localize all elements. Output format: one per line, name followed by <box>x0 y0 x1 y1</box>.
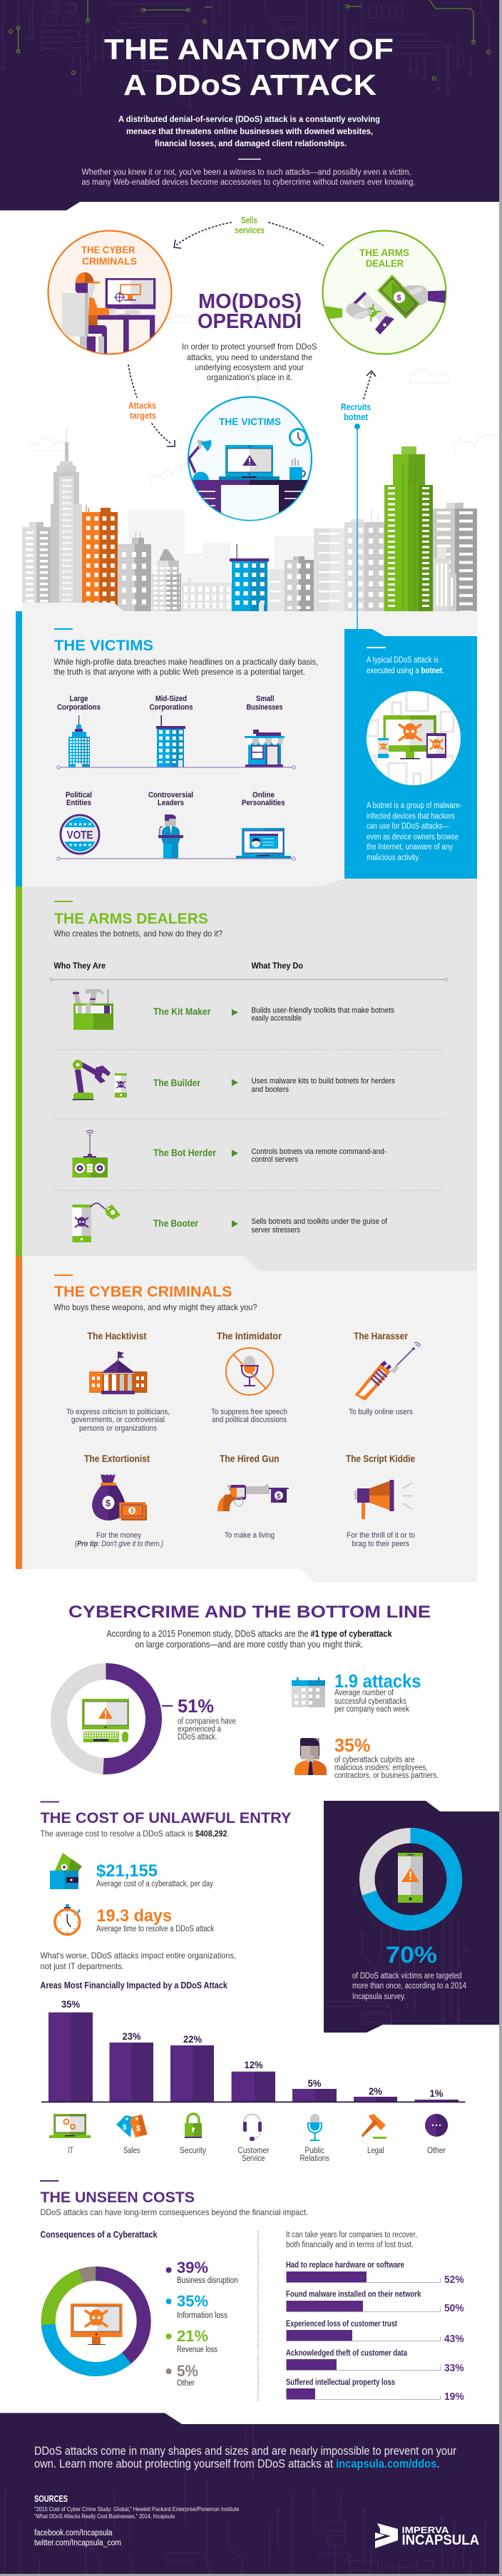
sidebar text bottom: malicious activity. <box>367 854 420 862</box>
stat: 35 percent insiders: malicious insiders: employees, <box>334 1764 428 1772</box>
label: recruits botnet: Recruits <box>341 402 371 412</box>
mid grey building <box>118 532 151 611</box>
criminal type: hacktivist: governments, or controversial <box>71 1416 165 1424</box>
arrow: attacks targets dotted lead <box>128 365 137 397</box>
recovery text <box>286 2231 417 2249</box>
horizontal bar chart: long-term impact: Suffered intellectual property loss <box>286 2378 395 2387</box>
victim labels row 1: Small <box>256 695 274 703</box>
heading: mo(ddos) operandi <box>198 290 302 333</box>
bar labels: Customer <box>238 2147 270 2155</box>
victim labels row 1 <box>57 695 282 712</box>
cyber criminals intro: Who buys these weapons, and why might they attack you? <box>54 1302 257 1312</box>
intro regular text <box>81 168 415 187</box>
icon: sales tags: $ <box>123 2124 127 2132</box>
legend: consequences <box>166 2259 238 2388</box>
stat: 70 percent: Incapsula survey. <box>352 1993 406 2001</box>
icon: money bag: $ <box>106 1498 111 1508</box>
far right grey building <box>433 503 477 611</box>
logo: imperva incapsula: IMPERVA <box>402 2525 449 2535</box>
modus operandi text: underlying ecosystem and your <box>195 362 304 372</box>
stat: 51 percent: DDoS attack. <box>178 1733 217 1742</box>
footer call to action <box>34 2444 456 2470</box>
icon: sales tags <box>116 2115 147 2137</box>
circuit pattern in panel <box>324 1918 468 2024</box>
panel: the arms dealers <box>16 879 477 1271</box>
icon: legal gavel <box>362 2114 386 2139</box>
bar values: 23% <box>123 2030 141 2042</box>
criminal type: harasser <box>349 1330 421 1416</box>
icon: speaker at podium <box>158 814 183 859</box>
icon: vote badge <box>61 815 99 854</box>
criminal type: intimidator: The Intimidator <box>217 1330 282 1341</box>
legend: consequences: 21% <box>177 2327 208 2345</box>
sources: SOURCES <box>34 2494 68 2504</box>
icon: phone warning <box>398 1853 423 1903</box>
circle: the arms dealer: THE ARMS <box>359 247 409 258</box>
victim labels row 1: Large <box>70 695 88 703</box>
intro regular text: as many Web-enabled devices become accessories to cybercrime without owners ever knowing. <box>81 178 415 187</box>
row: the builder <box>73 1060 395 1100</box>
intro bold text: menace that threatens online businesses with downed websites, <box>126 126 373 136</box>
sources <box>34 2494 240 2547</box>
bar values: 22% <box>183 2033 203 2045</box>
stat: 21,155 dollars: $21,155 <box>96 1861 158 1881</box>
stat: 35 percent insiders <box>334 1734 439 1780</box>
horizontal bar chart: long-term impact: 43% <box>444 2334 464 2345</box>
circle: the arms dealer: DEALER <box>366 257 404 269</box>
legend: consequences: 39% <box>177 2259 208 2276</box>
section intro: on large corporations—and are more costly than you might think. <box>135 1640 364 1650</box>
footer <box>0 2413 499 2574</box>
illustration: desk with laptop <box>187 428 314 521</box>
icon: vote badge: VOTE <box>67 829 93 842</box>
donut chart: 70 percent <box>367 1836 454 1923</box>
victim labels row 2: Online <box>252 791 275 799</box>
illustration: exchange of money and malware <box>324 275 446 334</box>
criminal type: script kiddie: The Script Kiddie <box>346 1453 415 1464</box>
stat: 35 percent insiders: contractors, or business partners. <box>334 1772 439 1780</box>
label: attacks targets: targets <box>130 411 156 421</box>
section intro: The average cost to resolve a DDoS attack is $408,292. <box>40 1829 230 1839</box>
row: the kit maker: The Kit Maker <box>153 1006 211 1017</box>
bar labels: Service <box>242 2155 265 2163</box>
bar values: 35% <box>61 1998 81 2010</box>
bar labels: IT <box>68 2147 73 2155</box>
stat: 51 percent: experienced a <box>178 1725 222 1734</box>
stat: 1.9 attacks: Average number of <box>334 1689 394 1697</box>
icon: wallet with cash <box>50 1853 82 1889</box>
icon: mid-sized corporation <box>156 715 185 767</box>
victim labels row 1: Corporations <box>57 703 101 712</box>
circle: the victims: THE VICTIMS <box>219 416 281 427</box>
connector: recruits botnet line <box>354 424 360 630</box>
criminal type: hired gun: The Hired Gun <box>220 1453 280 1464</box>
bar labels: Legal <box>367 2147 384 2155</box>
right mid grey building <box>285 556 314 611</box>
criminal type: hacktivist: To express criticism to politicians, <box>66 1408 170 1416</box>
criminal type: intimidator: To suppress free speech <box>211 1408 287 1416</box>
section: the unseen costs <box>40 2180 464 2403</box>
intro regular text: Whether you knew it or not, you've been a witness to such attacks—and possibly even a victim, <box>81 168 411 177</box>
criminal type: script kiddie: brag to their peers <box>352 1540 409 1548</box>
stat: 51 percent <box>178 1695 236 1742</box>
icon: computer warning <box>82 1699 129 1742</box>
stat: 70 percent: of DDoS attack victims are targeted <box>352 1972 462 1980</box>
bar labels: Public <box>305 2147 324 2155</box>
arms dealers intro: Who creates the botnets, and how do they do it? <box>54 929 222 939</box>
circle: the cyber criminals <box>48 231 171 358</box>
legend: consequences: Revenue loss <box>177 2346 217 2354</box>
bar labels: Relations <box>299 2155 329 2163</box>
sidebar text top: executed using a botnet. <box>367 667 444 675</box>
circle: the arms dealer <box>322 231 446 354</box>
icon: robot arm and phone <box>73 1060 127 1100</box>
icon: banned microphone <box>226 1348 273 1395</box>
section intro: According to a 2015 Ponemon study, DDoS attacks are the #1 type of cyberattack <box>107 1629 392 1639</box>
criminal type: hired gun: To make a living <box>225 1531 275 1540</box>
modus operandi text: attacks, you need to understand the <box>187 352 312 362</box>
circle: the cyber criminals: CRIMINALS <box>82 255 137 267</box>
criminal type: extortionist: The Extortionist <box>84 1453 150 1464</box>
icon: vote badge: ★★★★★ <box>68 842 92 848</box>
sources: "2015 Cost of Cyber Crime Study: Global," Hewlett Packard Enterprise/Ponemon Institute <box>34 2505 240 2513</box>
blue building <box>230 544 269 611</box>
panel: 70 percent repeat victims <box>324 1801 499 2033</box>
logo: imperva incapsula <box>375 2523 479 2548</box>
icon: sales tags: $ <box>136 2125 140 2133</box>
sidebar text bottom: infected devices that hackers <box>367 812 455 821</box>
pale background buildings <box>128 509 314 611</box>
sources: "What DDoS Attacks Really Cost Businesses," 2014, Incapsula <box>34 2513 175 2520</box>
stat: 19.3 days: Average time to resolve a DDoS attack <box>96 1925 214 1933</box>
illustration: exchange of money and malware: $ <box>396 294 401 302</box>
recovery text: It can take years for companies to recover, <box>286 2231 417 2239</box>
sidebar text bottom: can use for DDoS attacks— <box>367 822 449 831</box>
bar chart: financial impact areas <box>41 1998 465 2102</box>
icon: insider person <box>294 1738 327 1775</box>
modus operandi text <box>182 342 317 382</box>
title: THE ANATOMY OF <box>104 33 394 66</box>
arrow: sells services to cyber criminals <box>174 223 231 248</box>
icon: phone with price tag <box>73 1203 121 1242</box>
grey spired building <box>152 549 181 611</box>
tall light building <box>314 528 344 611</box>
paragraph: what's worse <box>40 1951 236 1971</box>
icon: security padlock <box>185 2114 202 2138</box>
icon: vote badge: ★★★★★ <box>68 822 92 827</box>
stat: 1.9 attacks: successful cyberattacks <box>334 1697 406 1706</box>
horizontal bar chart: long-term impact: Acknowledged theft of customer data <box>286 2349 407 2358</box>
paragraph: what's worse: not just IT departments. <box>40 1961 124 1971</box>
row: the bot herder: control servers <box>251 1155 298 1164</box>
header banner <box>0 0 499 210</box>
recovery text: both financially and in terms of lost trust. <box>286 2241 414 2249</box>
horizontal bar chart: long-term impact: Found malware installed on their network <box>286 2291 421 2299</box>
icon: stopwatch <box>55 1904 81 1934</box>
sidebar text bottom <box>367 802 462 862</box>
label: attacks targets <box>128 401 156 421</box>
heading: mo(ddos) operandi: OPERANDI <box>198 310 302 333</box>
icon: public relations microphone <box>307 2114 322 2141</box>
chart title: Areas Most Financially Impacted by a DDoS Attack <box>40 1980 227 1990</box>
bar values: 1% <box>429 2087 444 2099</box>
light low building <box>182 578 232 611</box>
bar labels: Sales <box>123 2147 140 2155</box>
donut chart: 51 percent <box>58 1672 154 1766</box>
sidebar text bottom: the Internet, unaware of any <box>367 843 453 852</box>
icon: large corporation tower <box>68 715 90 767</box>
intro bold text: A distributed denial-of-service (DDoS) attack is a constantly evolving <box>118 114 380 124</box>
grey building far left <box>22 522 51 611</box>
panel: the victims <box>16 603 477 886</box>
arrow: dotted from arms dealer <box>269 223 323 245</box>
criminal type: hired gun <box>217 1453 289 1540</box>
timeline row 1 <box>57 766 295 769</box>
stat: 35 percent insiders: 35% <box>334 1734 371 1756</box>
panel: botnet sidebar <box>344 629 477 879</box>
illustration: infected devices <box>367 690 461 788</box>
stat: 35 percent insiders: of cyberattack culprits are <box>334 1756 415 1764</box>
stat: 51 percent: of companies have <box>178 1717 236 1726</box>
stat: 1.9 attacks: 1.9 attacks <box>334 1670 421 1692</box>
section intro: DDoS attacks can have long-term consequences beyond the financial impact. <box>40 2207 308 2217</box>
tall grey skyscraper <box>51 428 82 611</box>
stat: 1.9 attacks: per company each week <box>334 1705 409 1714</box>
heading: THE COST OF UNLAWFUL ENTRY <box>40 1810 291 1826</box>
row: the booter: The Booter <box>153 1217 198 1229</box>
criminal type: hacktivist: The Hacktivist <box>87 1330 147 1341</box>
sources: twitter.com/Incapsula_com <box>34 2539 121 2547</box>
bar labels: Other <box>427 2147 446 2155</box>
sidebar text bottom: A botnet is a group of malware- <box>367 802 462 810</box>
criminal type: intimidator: and political discussions <box>212 1416 287 1424</box>
illustration: hacker at desk <box>62 272 155 358</box>
row: the bot herder: Controls botnets via remote command-and- <box>251 1148 386 1156</box>
bar values: 12% <box>244 2059 263 2070</box>
stat: 21,155 dollars <box>96 1861 213 1888</box>
chart title: Consequences of a Cyberattack <box>40 2229 158 2239</box>
stat: 70 percent <box>352 1942 467 2001</box>
label: attacks targets: Attacks <box>128 401 156 411</box>
section: cybercrime and the bottom line <box>58 1603 439 1780</box>
modus operandi text: organization's place in it. <box>207 372 292 382</box>
victim labels row 2: Personalities <box>242 799 285 807</box>
label: recruits botnet: botnet <box>344 412 369 422</box>
legend: consequences: Other <box>177 2379 195 2388</box>
label: sells services <box>235 215 265 235</box>
icon: calendar <box>292 1677 325 1707</box>
circle: the cyber criminals: THE CYBER <box>81 244 135 255</box>
criminal type: intimidator <box>211 1330 287 1424</box>
criminal type: extortionist: (Pro tip: Don't give it to them.) <box>75 1540 163 1548</box>
legend: consequences: 5% <box>177 2362 198 2380</box>
victim labels row 1: Corporations <box>150 703 193 712</box>
sources: facebook.com/Incapsula <box>34 2529 113 2537</box>
row: the booter: Sells botnets and toolkits under the guise of <box>251 1217 388 1226</box>
bar values <box>61 1998 444 2099</box>
icon: other circle <box>425 2114 448 2137</box>
victims intro text <box>54 657 318 677</box>
criminal type: extortionist <box>75 1453 163 1548</box>
donut chart: consequences <box>48 2274 144 2369</box>
row: the kit maker: easily accessible <box>251 1014 302 1023</box>
modus operandi text: In order to protect yourself from DDoS <box>182 342 317 352</box>
row: the booter: server stressers <box>251 1226 300 1235</box>
icon: government building <box>89 1351 147 1394</box>
heading: the arms dealers: THE ARMS DEALERS <box>54 911 208 927</box>
horizontal bar chart: long-term impact: 50% <box>444 2303 464 2314</box>
bar values: 5% <box>308 2077 322 2089</box>
label: recruits botnet <box>341 402 371 422</box>
stat: 19.3 days: 19.3 days <box>97 1906 172 1926</box>
victim labels row 2 <box>66 791 285 807</box>
arrow: attacks targets to victims <box>152 424 175 446</box>
section: the cost of unlawful entry <box>40 1801 465 2163</box>
arrow: recruits botnet <box>364 371 376 399</box>
criminal type: extortionist: For the money <box>96 1531 141 1540</box>
stat: 70 percent: more than once, according to a 2014 <box>352 1982 467 1990</box>
criminal type: harasser: To bully online users <box>349 1408 413 1416</box>
row: the booter <box>73 1203 388 1242</box>
horizontal bar chart: long-term impact: Had to replace hardware or software <box>286 2261 404 2269</box>
heading: mo(ddos) operandi: MO(DDoS) <box>198 290 302 313</box>
horizontal bar chart: long-term impact: 33% <box>444 2363 464 2374</box>
row: the builder: The Builder <box>153 1077 200 1088</box>
circle: the victims <box>187 397 314 521</box>
icon: laptop with profile <box>236 828 291 859</box>
section intro <box>107 1629 392 1650</box>
footer call to action: own. Learn more about protecting yourself from DDoS attacks at incapsula.com/ddos. <box>34 2457 439 2470</box>
header circuit pattern <box>1 0 490 108</box>
bar labels: Security <box>180 2147 206 2155</box>
skyline city illustration <box>22 428 477 611</box>
timeline row 2 <box>57 857 295 860</box>
icon: toolbox <box>73 989 113 1030</box>
clouds <box>31 315 499 487</box>
victim labels row 2: Leaders <box>158 799 184 807</box>
title: A DDoS ATTACK <box>123 68 376 101</box>
row: the kit maker <box>73 989 394 1030</box>
orange building <box>82 505 118 611</box>
victims intro text: While high-profile data breaches make headlines on a practically daily basis, <box>54 657 318 667</box>
heading: THE UNSEEN COSTS <box>40 2189 195 2206</box>
table headers <box>54 961 303 971</box>
intro bold text: financial losses, and damaged client relationships. <box>155 138 347 148</box>
stat: 19.3 days <box>96 1906 214 1933</box>
paragraph: what's worse: What's worse, DDoS attacks impact entire organizations, <box>40 1951 236 1961</box>
footer circuit pattern <box>4 2425 486 2574</box>
intro bold text <box>118 114 380 148</box>
sidebar text top <box>367 656 444 675</box>
stat: 70 percent: 70% <box>386 1942 437 1968</box>
horizontal bar chart: long-term impact: Experienced loss of customer trust <box>286 2320 397 2329</box>
logo: imperva incapsula: INCAPSULA <box>402 2532 479 2548</box>
row: the builder: and booters <box>251 1085 289 1094</box>
legend: consequences: 35% <box>177 2292 208 2310</box>
icon: remote control <box>73 1130 108 1177</box>
sidebar text bottom: even as device owners browse <box>367 833 459 842</box>
bar values: 2% <box>369 2085 383 2097</box>
victim labels row 2: Political <box>66 791 92 799</box>
victim labels row 2: Controversial <box>148 791 193 799</box>
sidebar text top: A typical DDoS attack is <box>367 656 439 665</box>
right light building <box>267 569 285 611</box>
criminal type: harasser: The Harasser <box>354 1330 408 1341</box>
green tower <box>384 446 433 611</box>
icon: infected monitor <box>71 2304 123 2345</box>
criminal type: script kiddie <box>346 1453 415 1548</box>
table headers: Who They Are <box>54 961 106 971</box>
row: the bot herder <box>73 1130 386 1177</box>
row: the kit maker: Builds user-friendly toolkits that make botnets <box>251 1006 394 1015</box>
legend: consequences: Business disruption <box>177 2276 238 2285</box>
victim labels row 2: Entities <box>66 799 91 807</box>
heading: the cyber criminals: THE CYBER CRIMINALS <box>54 1284 232 1300</box>
criminal type: script kiddie: For the thrill of it or to <box>347 1531 415 1540</box>
horizontal bar chart: long-term impact: 19% <box>444 2391 464 2403</box>
icon: customer service headset <box>243 2115 262 2141</box>
icon: small business storefront <box>245 730 285 767</box>
victim labels row 1: Mid-Sized <box>155 695 187 703</box>
stat: 51 percent: 51% <box>178 1695 214 1717</box>
label: sells services: Sells <box>241 215 257 225</box>
panel: the cyber criminals <box>16 1256 477 1583</box>
icon: money bag: $ <box>130 1508 134 1514</box>
icon: money bag <box>92 1474 147 1520</box>
legend: consequences: Information loss <box>177 2311 227 2320</box>
row: the bot herder: The Bot Herder <box>153 1147 216 1158</box>
icon: IT laptop <box>49 2114 91 2138</box>
heading: CYBERCRIME AND THE BOTTOM LINE <box>68 1603 431 1622</box>
table headers: What They Do <box>251 961 303 971</box>
icon: walkie talkie <box>355 1343 421 1401</box>
victim labels row 1: Businesses <box>247 703 282 712</box>
heading: the victims: THE VICTIMS <box>54 638 153 654</box>
victims intro text: the truth is that anyone with a public Web presence is a potential target. <box>54 667 305 677</box>
horizontal bar chart: long-term impact: 52% <box>444 2274 464 2286</box>
icon: megaphone <box>354 1480 412 1519</box>
row: the builder: Uses malware kits to build botnets for herders <box>251 1077 395 1085</box>
bar labels <box>68 2147 446 2163</box>
title <box>104 33 394 101</box>
stat: 1.9 attacks <box>334 1670 421 1714</box>
stat: 21,155 dollars: Average cost of a cyberattack, per day <box>96 1880 213 1888</box>
criminal type: hacktivist: persons or organizations <box>79 1424 157 1433</box>
criminal type: hacktivist <box>66 1330 170 1433</box>
horizontal bar chart: long-term impact <box>286 2261 464 2403</box>
icon: revolver: $ <box>277 1493 281 1501</box>
building behind green tower <box>344 510 384 611</box>
label: sells services: services <box>235 225 265 235</box>
